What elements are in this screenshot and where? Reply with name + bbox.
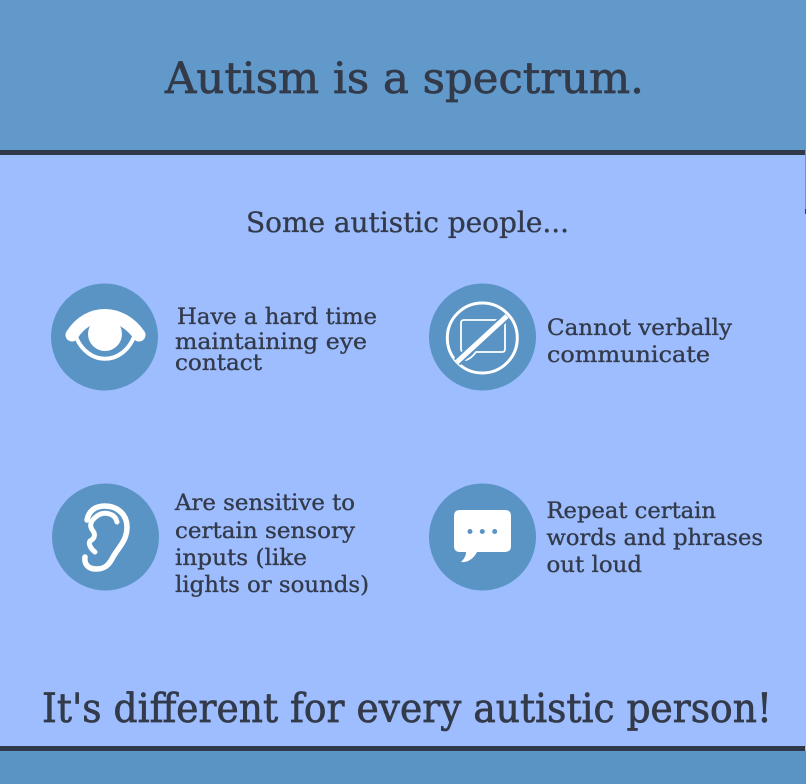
text: eye contact: contact bbox=[175, 351, 262, 376]
text: sensory inputs: lights or sounds) bbox=[175, 573, 369, 598]
text: sensory inputs: inputs (like bbox=[175, 546, 307, 571]
text: verbal communication: communicate bbox=[547, 343, 710, 368]
item: eye contact bbox=[51, 284, 377, 390]
text: eye contact bbox=[175, 305, 377, 376]
text: repeating words bbox=[546, 499, 763, 578]
text: sensory inputs: Are sensitive to bbox=[174, 491, 355, 516]
title: Autism is a spectrum. bbox=[164, 54, 644, 104]
item: verbal communication bbox=[429, 284, 733, 390]
icon: eye bbox=[51, 284, 158, 390]
closing statement: It's different for every autistic person! bbox=[42, 686, 772, 732]
header band bbox=[0, 0, 806, 214]
text: eye contact: Have a hard time bbox=[177, 305, 377, 330]
icon: speech bubble with dots bbox=[429, 484, 536, 590]
text: eye contact: maintaining eye bbox=[175, 330, 367, 355]
footer band bbox=[0, 746, 806, 784]
text: repeating words: Repeat certain bbox=[546, 499, 716, 524]
text: verbal communication bbox=[547, 316, 733, 368]
text: verbal communication: Cannot verbally bbox=[547, 316, 733, 341]
subheading: Some autistic people... bbox=[246, 206, 569, 239]
text: sensory inputs bbox=[174, 491, 369, 598]
item: repeating words bbox=[429, 484, 763, 590]
text: repeating words: words and phrases bbox=[546, 526, 763, 551]
text: sensory inputs: certain sensory bbox=[175, 519, 356, 544]
text: repeating words: out loud bbox=[546, 553, 642, 578]
item: sensory inputs bbox=[52, 484, 369, 598]
icon: crossed speech bubble bbox=[429, 284, 536, 390]
icon: ear bbox=[52, 484, 159, 590]
